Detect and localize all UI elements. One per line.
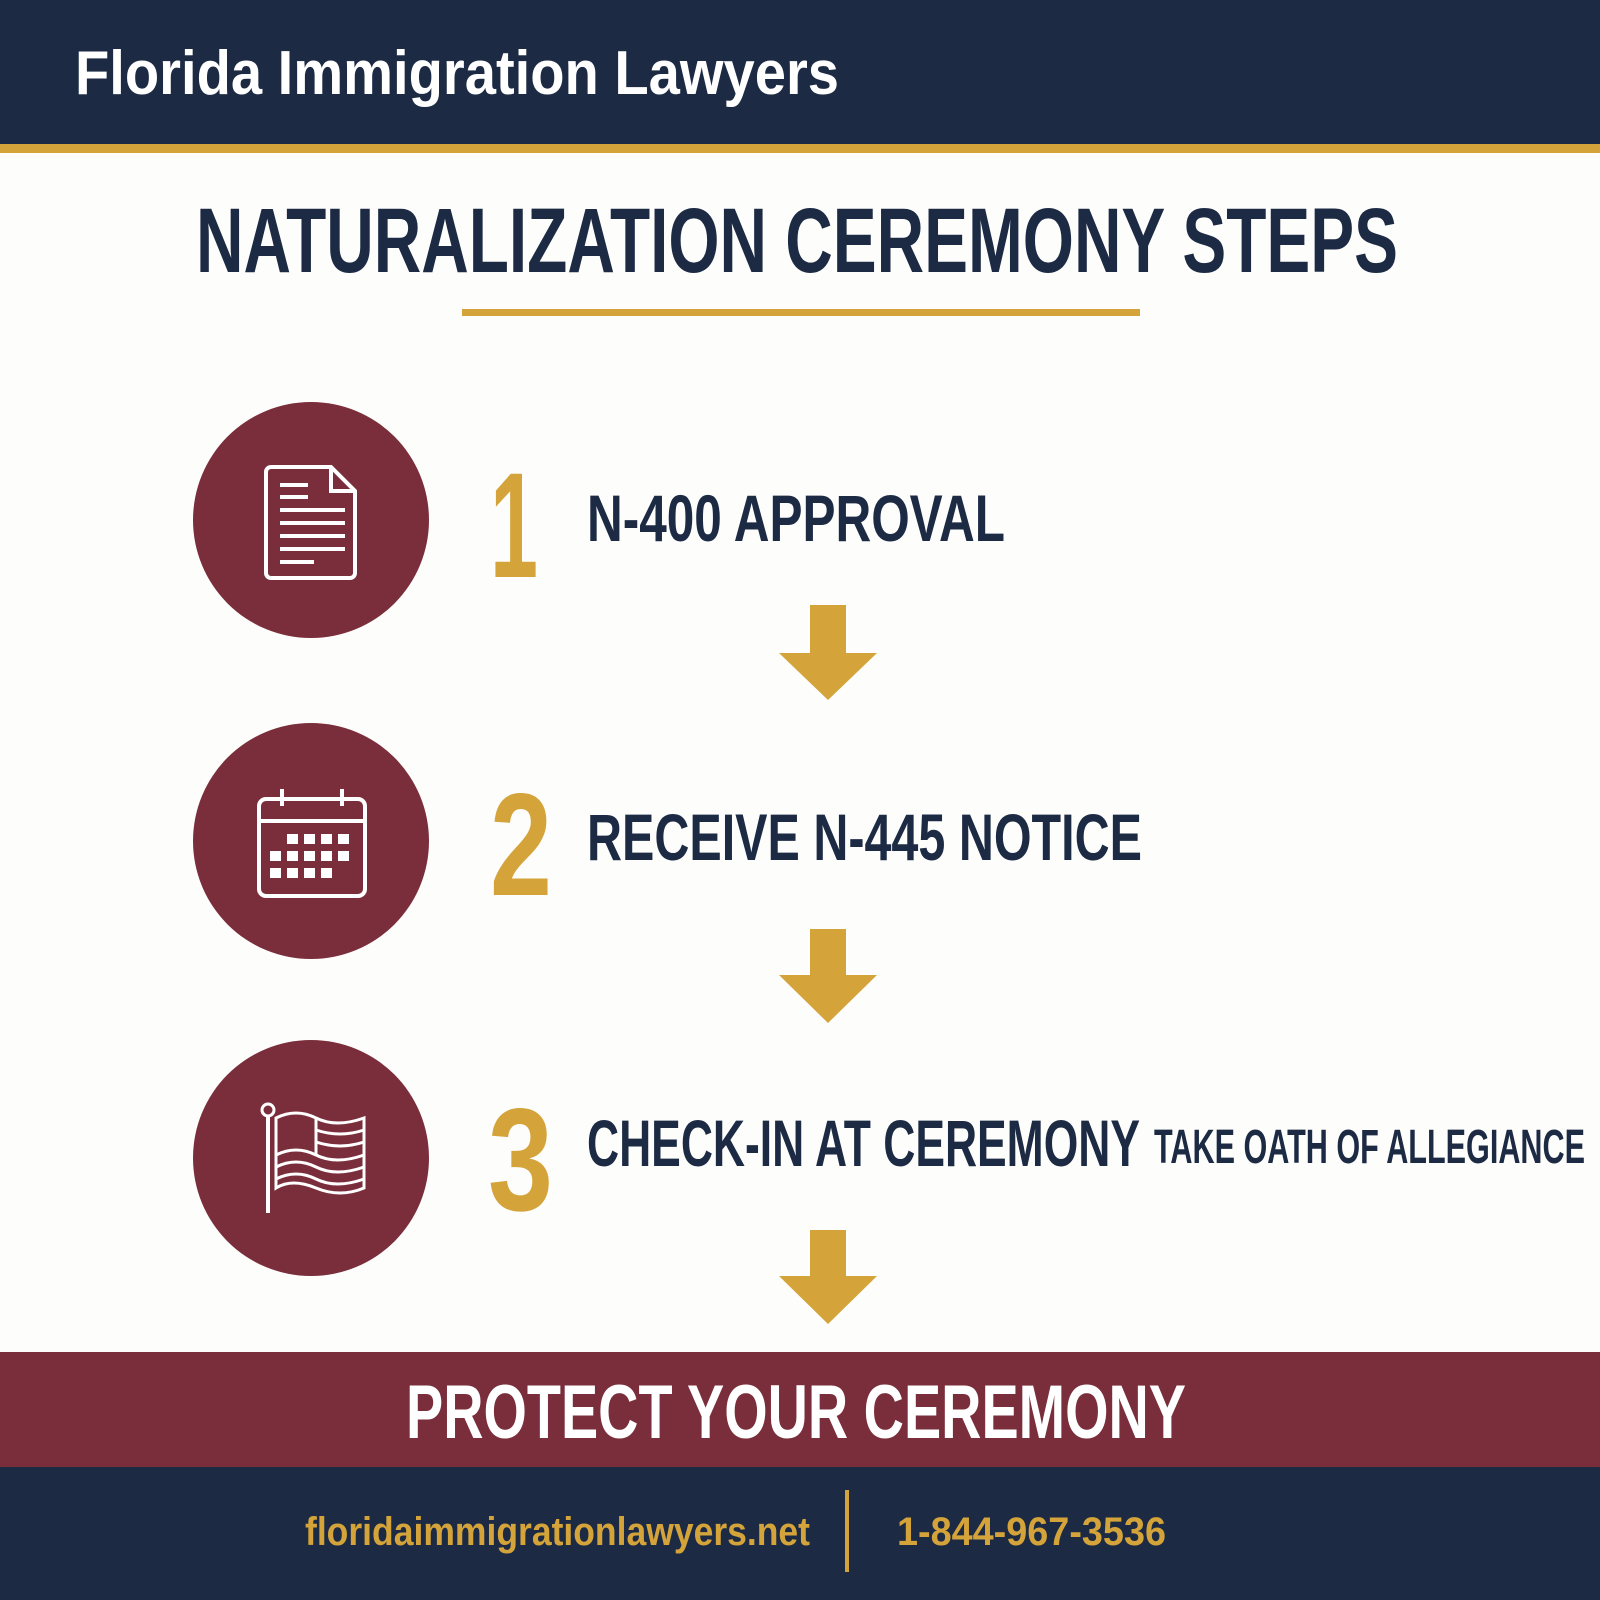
icon: flag [193,1040,429,1276]
header brand text: Florida Immigration Lawyers [75,39,839,108]
step number 3: 3 [488,1078,553,1241]
call to action band: PROTECT YOUR CEREMONY [406,1370,1186,1455]
footer phone: 1-844-967-3536 [897,1510,1166,1554]
step 1 [193,402,1005,638]
step 3 [193,1040,1585,1276]
footer [0,1467,1600,1600]
arrow 1 [779,605,877,700]
step label 2: RECEIVE N-445 NOTICE [587,800,1142,874]
footer website: floridaimmigrationlawyers.net [305,1510,810,1554]
header bar [0,0,1600,153]
call to action band [0,1352,1600,1467]
arrow 3 [779,1230,877,1324]
step number 1: 1 [490,441,538,609]
step label 3: CHECK-IN AT CEREMONY [587,1106,1140,1180]
step label 1: N-400 APPROVAL [587,481,1005,555]
step 2 [193,723,1142,959]
step number 2: 2 [490,763,552,926]
icon: document [193,402,429,638]
arrow 2 [779,929,877,1023]
icon: calendar [193,723,429,959]
title underline [462,309,1140,316]
